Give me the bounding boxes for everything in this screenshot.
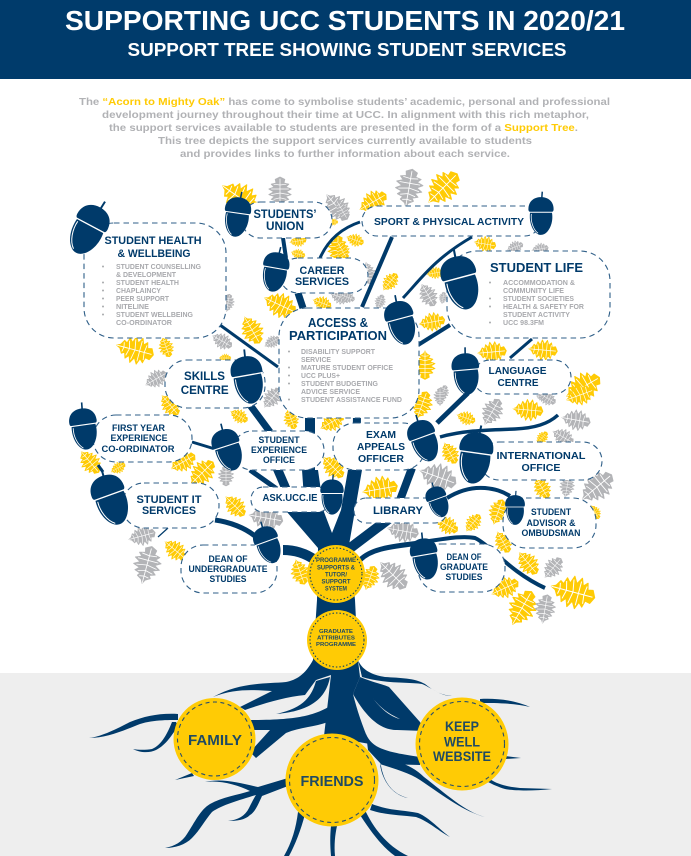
icon: acorn [421,479,453,520]
panel: student health and wellbeing: STUDENT HEALTH [104,235,202,247]
panel: dean of undergraduate studies: STUDIES [210,574,246,584]
panel: skills centre: CENTRE [181,383,229,397]
circle: keep well website: WEBSITE [433,748,491,764]
circle: keep well website [416,698,508,790]
panel: language centre: CENTRE [498,377,538,389]
intro text block: development journey throughout their time at UCC. In alignment with this rich metaphor, [102,109,589,121]
circle: graduate attributes programme: GRADUATE [319,629,353,635]
panel: student it services: SERVICES [142,505,196,517]
circle: graduate attributes programme: PROGRAMME [316,642,356,648]
circle: keep well website: WELL [444,734,480,750]
panel: student health and wellbeing: & WELLBEING [118,248,190,260]
panel: students' union: UNION [266,221,304,233]
services list: CO-ORDINATOR [116,320,172,327]
icon: acorn [84,463,136,530]
trunk and roots [89,470,552,856]
services list: STUDENT COUNSELLING [116,264,202,271]
services list: ADVICE SERVICE [301,389,360,396]
intro text block: This tree depicts the support services currently available to students [158,135,532,147]
header band [0,0,691,79]
panel: dean of graduate studies: STUDIES [446,572,482,582]
panel: dean of undergraduate studies: UNDERGRADUATE [188,564,268,574]
panel: access and participation: ACCESS & [308,316,368,330]
icon: acorn [320,474,344,515]
circle: programme supports [307,545,365,603]
panel: students' union: STUDENTS’ [254,209,316,221]
services list: & DEVELOPMENT [116,272,177,279]
panel: student advisor and ombudsman: ADVISOR & [526,518,576,528]
icon: acorn [528,192,554,235]
panel: first year experience co-ordinator [67,401,192,462]
panel: career services: CAREER [300,265,345,277]
icon: acorn [221,190,254,238]
icon: acorn [435,245,485,314]
circle: keep well website: KEEP [445,718,479,734]
panel: international office: OFFICE [522,462,560,474]
panel: student experience office [206,420,324,475]
panel: language centre [450,346,571,396]
services list: STUDENT WELLBEING [116,312,194,319]
panel: student it services [84,463,219,530]
icon: acorn [67,401,101,451]
services list: NITELINE [116,304,149,311]
icon: acorn [407,530,442,582]
panel: access and participation: PARTICIPATION [289,329,387,343]
panel: student experience office: EXPERIENCE [251,445,307,455]
intro text block: and provides links to further information about each service. [180,148,510,160]
services list: UCC PLUS+ [301,373,340,380]
panel: student advisor and ombudsman: OMBUDSMAN [522,528,580,538]
intro text block [79,96,610,160]
panel: language centre: LANGUAGE [488,365,546,377]
services list: UCC 98.3FM [503,320,544,327]
circle: family [174,698,256,780]
panel: student health and wellbeing [61,193,226,338]
panel: student life [435,245,610,338]
panel: dean of undergraduate studies [181,518,286,593]
subtitle: SUPPORT TREE SHOWING STUDENT SERVICES [128,39,566,60]
services list [489,280,584,327]
services list: SERVICE [301,357,331,364]
panel: exam appeals officer: OFFICER [358,453,404,465]
panel: exam appeals officer: APPEALS [357,441,405,453]
services list: STUDENT BUDGETING [301,381,379,388]
panel: sport and physical activity: SPORT & PHYSICAL ACTIVITY [374,216,524,228]
panel: dean of undergraduate studies: DEAN OF [208,554,248,564]
circle: programme supports: TUTOR/ [325,572,347,578]
circle: programme supports: SYSTEM [325,586,347,592]
icon: acorn [248,518,286,567]
services list: PEER SUPPORT [116,296,170,303]
panel: dean of graduate studies [407,530,505,592]
intro text block: the support services available to students are presented in the form of a Support Tree . [109,122,578,134]
icon: acorn [379,292,421,348]
services list: CHAPLAINCY [116,288,161,295]
circle: graduate attributes programme [307,610,367,670]
panel: first year experience co-ordinator: CO-ORDINATOR [102,444,175,454]
icon: acorn [259,245,292,294]
oak leaves [74,164,620,631]
services list: STUDENT ASSISTANCE FUND [301,397,402,404]
icon: acorn [227,347,268,406]
panel: sport and physical activity [362,192,554,236]
services list: DISABILITY SUPPORT [301,349,376,356]
panel: first year experience co-ordinator: EXPERIENCE [110,433,168,443]
panel: exam appeals officer [333,411,444,470]
panel: first year experience co-ordinator: FIRST YEAR [112,423,165,433]
panel: library [354,479,453,523]
services list: ACCOMMODATION & [503,280,575,287]
services list: HEALTH & SAFETY FOR [503,304,584,311]
services list: STUDENT SOCIETIES [503,296,574,303]
icon: acorn [454,423,497,486]
tree branches [98,222,558,588]
panel: students' union [221,190,332,238]
intro text block: The “Acorn to Mighty Oak” has come to symbolise students’ academic, personal and professional [79,96,610,108]
circle: programme supports: SUPPORTS & [317,566,356,572]
circle: friends: FRIENDS [300,774,364,790]
circle: programme supports: SUPPORT [322,580,351,586]
title: SUPPORTING UCC STUDENTS IN 2020/21 [65,5,625,36]
services list: MATURE STUDENT OFFICE [301,365,393,372]
panel: student experience office: STUDENT [258,435,300,445]
ground band [0,673,691,856]
panel: skills centre [165,347,268,408]
services list [288,349,402,404]
panel: access and participation [279,292,421,418]
services list [102,264,202,327]
icon: acorn [206,420,248,475]
panel: student experience office: OFFICE [263,455,295,465]
panel: career services: SERVICES [295,276,349,288]
circle: friends [286,734,378,826]
panel: student advisor and ombudsman: STUDENT [531,507,571,517]
panel: exam appeals officer: EXAM [366,429,396,441]
panel: ask.ucc.ie [251,474,344,515]
panel: international office: INTERNATIONAL [496,450,586,462]
panel: student it services: STUDENT IT [136,494,202,506]
icon: acorn [450,346,482,396]
panel: dean of graduate studies: DEAN OF [446,552,482,562]
services list: STUDENT HEALTH [116,280,179,287]
panel: library: LIBRARY [373,505,424,517]
circle: family: FAMILY [188,733,242,749]
icon: acorn [401,411,444,466]
circle: graduate attributes programme: ATTRIBUTES [317,636,355,642]
circle: programme supports: PROGRAMME [316,558,356,564]
panel: skills centre: SKILLS [184,369,225,383]
panel: student advisor and ombudsman [503,491,596,548]
panel: dean of graduate studies: GRADUATE [440,562,488,572]
panel: career services [259,245,368,294]
services list: STUDENT ACTIVITY [503,312,570,319]
panel: student life: STUDENT LIFE [490,260,583,275]
services list: COMMUNITY LIFE [503,288,564,295]
panel: international office [454,423,602,486]
icon: acorn [61,193,119,261]
icon: acorn [505,491,525,525]
panel: ask.ucc.ie: ASK.UCC.IE [262,492,318,504]
